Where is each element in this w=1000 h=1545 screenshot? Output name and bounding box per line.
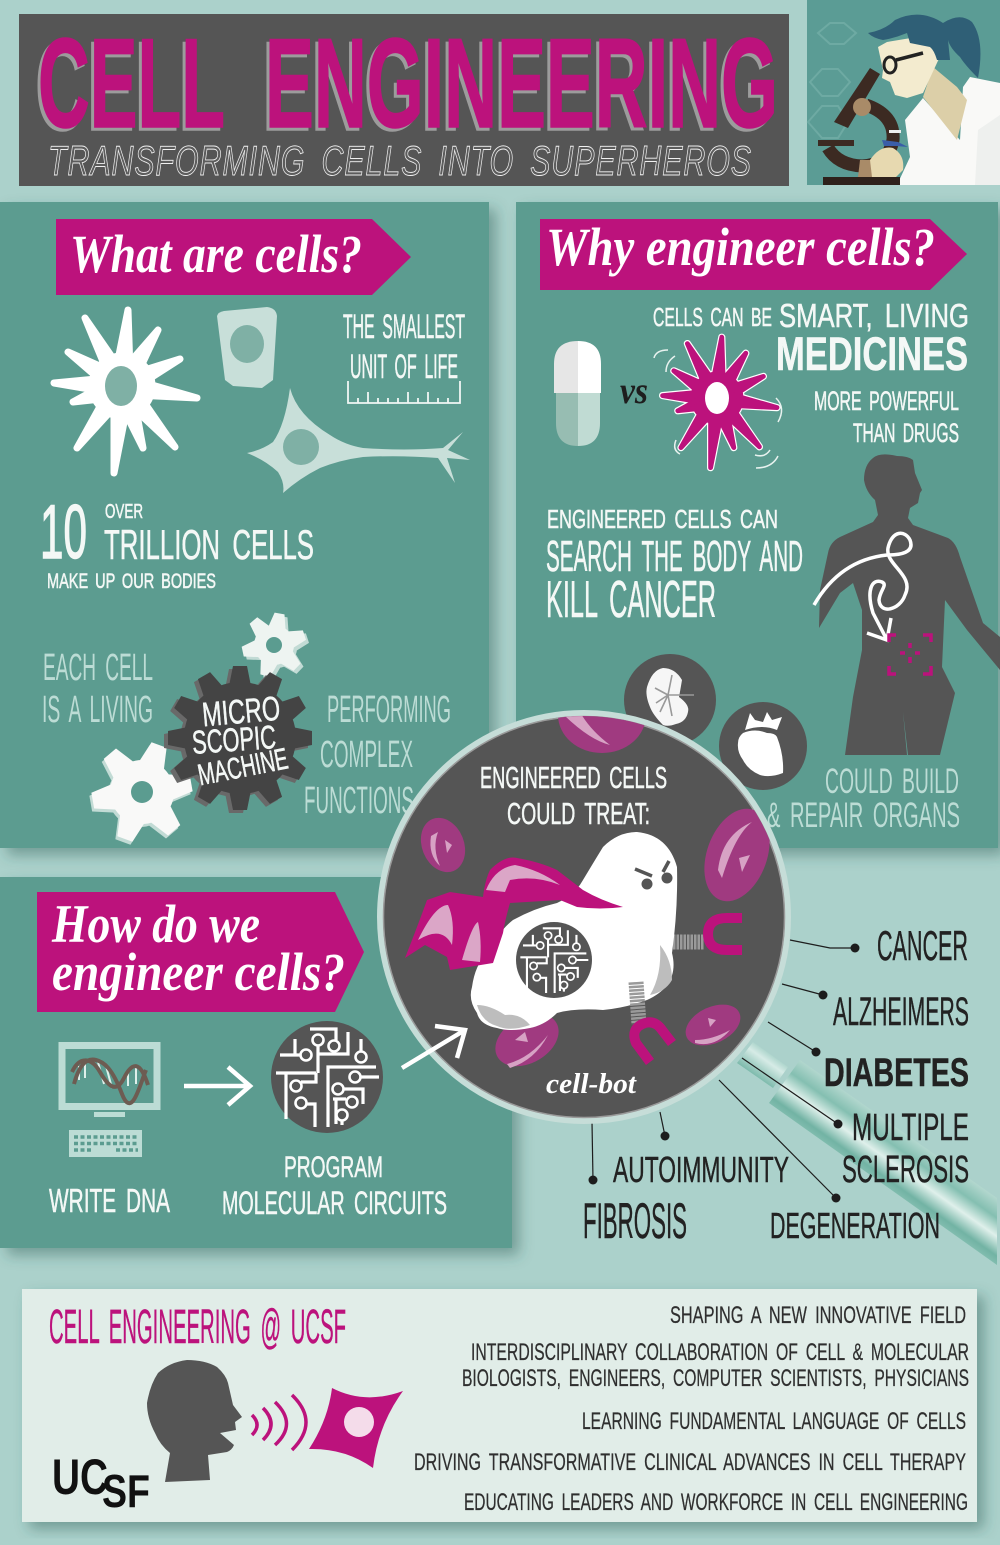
blood cells — [420, 716, 770, 1068]
text: could treat: ENGINEERED CELLS — [480, 760, 667, 795]
text: program molecular circuits: MOLECULAR CIRCUITS — [222, 1185, 447, 1221]
title: CELL — [38, 12, 225, 154]
icon: large gear with text — [164, 666, 312, 813]
panel: what are cells: UNIT OF LIFE — [350, 348, 458, 386]
robot body — [471, 832, 677, 1030]
circuit emblem — [516, 922, 592, 998]
chart: disease list with leader lines: FIBROSIS — [583, 1193, 687, 1249]
icon: star cell — [54, 310, 197, 473]
icon: speaking head — [147, 1360, 242, 1482]
subtitle: TRANSFORMING CELLS INTO SUPERHEROS — [48, 137, 752, 184]
icon: kidney circle — [624, 654, 716, 746]
chart: disease list with leader lines — [583, 922, 969, 1249]
panel: what are cells — [0, 202, 489, 848]
text: write DNA: WRITE DNA — [49, 1182, 170, 1219]
text: each cell is a living: EACH CELL — [43, 647, 153, 689]
ruler — [348, 381, 460, 403]
title: CELL — [35, 15, 222, 157]
cape — [405, 858, 623, 970]
icon: molecular circuit — [271, 1021, 383, 1133]
illustration: scientist at microscope — [807, 0, 1000, 185]
heading banner: How do we — [51, 894, 260, 954]
icon: small gear top — [241, 612, 310, 681]
text: 10 trillion cells: 10 — [40, 490, 87, 575]
panel: why engineer cells — [516, 202, 1000, 848]
text: build and repair organs — [767, 762, 960, 835]
text: program molecular circuits: PROGRAM — [284, 1151, 383, 1184]
text: search the body: KILL CANCER — [546, 571, 716, 629]
text: 10 trillion cells: OVER — [105, 501, 143, 523]
text: performing complex functions: COMPLEX — [320, 734, 413, 776]
logo: UCSF: UC — [52, 1449, 108, 1505]
text: 10 trillion cells: MAKE UP OUR BODIES — [47, 570, 216, 593]
icon: body silhouette with arrow — [814, 454, 1000, 755]
text: search the body — [546, 504, 803, 629]
icon: magenta cell — [309, 1388, 403, 1468]
magnet arm bottom — [634, 982, 672, 1062]
heading banner — [37, 892, 364, 1012]
icon: pill — [554, 341, 601, 446]
text: smart living medicines: CELLS CAN BE — [653, 302, 772, 332]
icon: large gear with text: SCOPIC — [191, 718, 277, 761]
decorative needle tube — [737, 1042, 997, 1265]
text: performing complex functions: FUNCTIONS — [304, 780, 414, 822]
arrow to lens — [402, 1026, 465, 1068]
panel: what are cells: THE SMALLEST — [343, 308, 465, 346]
icon: computer with DNA — [62, 1046, 157, 1157]
icon: large gear with text: MICRO — [201, 690, 282, 734]
icon: epithelial cell — [217, 307, 277, 388]
circle: engineered cells could treat — [380, 677, 788, 1121]
panel: cell engineering at UCSF — [22, 1289, 977, 1522]
text: program molecular circuits — [222, 1151, 447, 1221]
text: each cell is a living — [42, 647, 153, 731]
icon: neuron — [247, 388, 470, 493]
text: smart living medicines — [653, 297, 969, 448]
arrow — [184, 1067, 250, 1105]
label: cell-bot: cell-bot — [546, 1069, 637, 1100]
heading banner: Why engineer cells? — [546, 217, 935, 277]
icon: white gear bottom — [89, 741, 193, 846]
text: 10 trillion cells — [40, 490, 314, 593]
title — [35, 12, 778, 157]
text: 10 trillion cells: TRILLION CELLS — [104, 521, 314, 568]
icon: sound waves — [252, 1395, 306, 1450]
title banner — [19, 12, 789, 186]
vs label: vs — [620, 370, 648, 412]
cell-bot — [405, 832, 742, 1062]
heading banner: engineer cells? — [52, 942, 345, 1002]
text: smallest unit of life — [343, 308, 465, 386]
heading banner: What are cells? — [70, 224, 362, 284]
text: could treat: COULD TREAT: — [507, 796, 650, 831]
text: could treat — [480, 760, 667, 831]
text: performing complex functions — [304, 689, 451, 822]
logo: UCSF: SF — [102, 1465, 150, 1517]
panel: what are cells: PERFORMING — [327, 689, 451, 731]
icon: large gear with text: MACHINE — [195, 742, 291, 792]
face — [635, 861, 672, 890]
text: each cell is a living: IS A LIVING — [42, 689, 153, 731]
icon: heart circle — [719, 702, 807, 790]
text block: list — [414, 1302, 969, 1516]
panel: how do we engineer cells — [0, 877, 512, 1248]
text: search the body: ENGINEERED CELLS CAN — [547, 504, 778, 534]
logo: UCSF — [52, 1449, 150, 1517]
panel: cell engineering at UCSF: CELL ENGINEERING @ UCSF — [49, 1301, 346, 1354]
chart: disease list with leader lines: AUTOIMMUNITY — [613, 1149, 789, 1190]
icon: magenta cell — [654, 337, 782, 468]
magnet arm right — [673, 918, 742, 950]
